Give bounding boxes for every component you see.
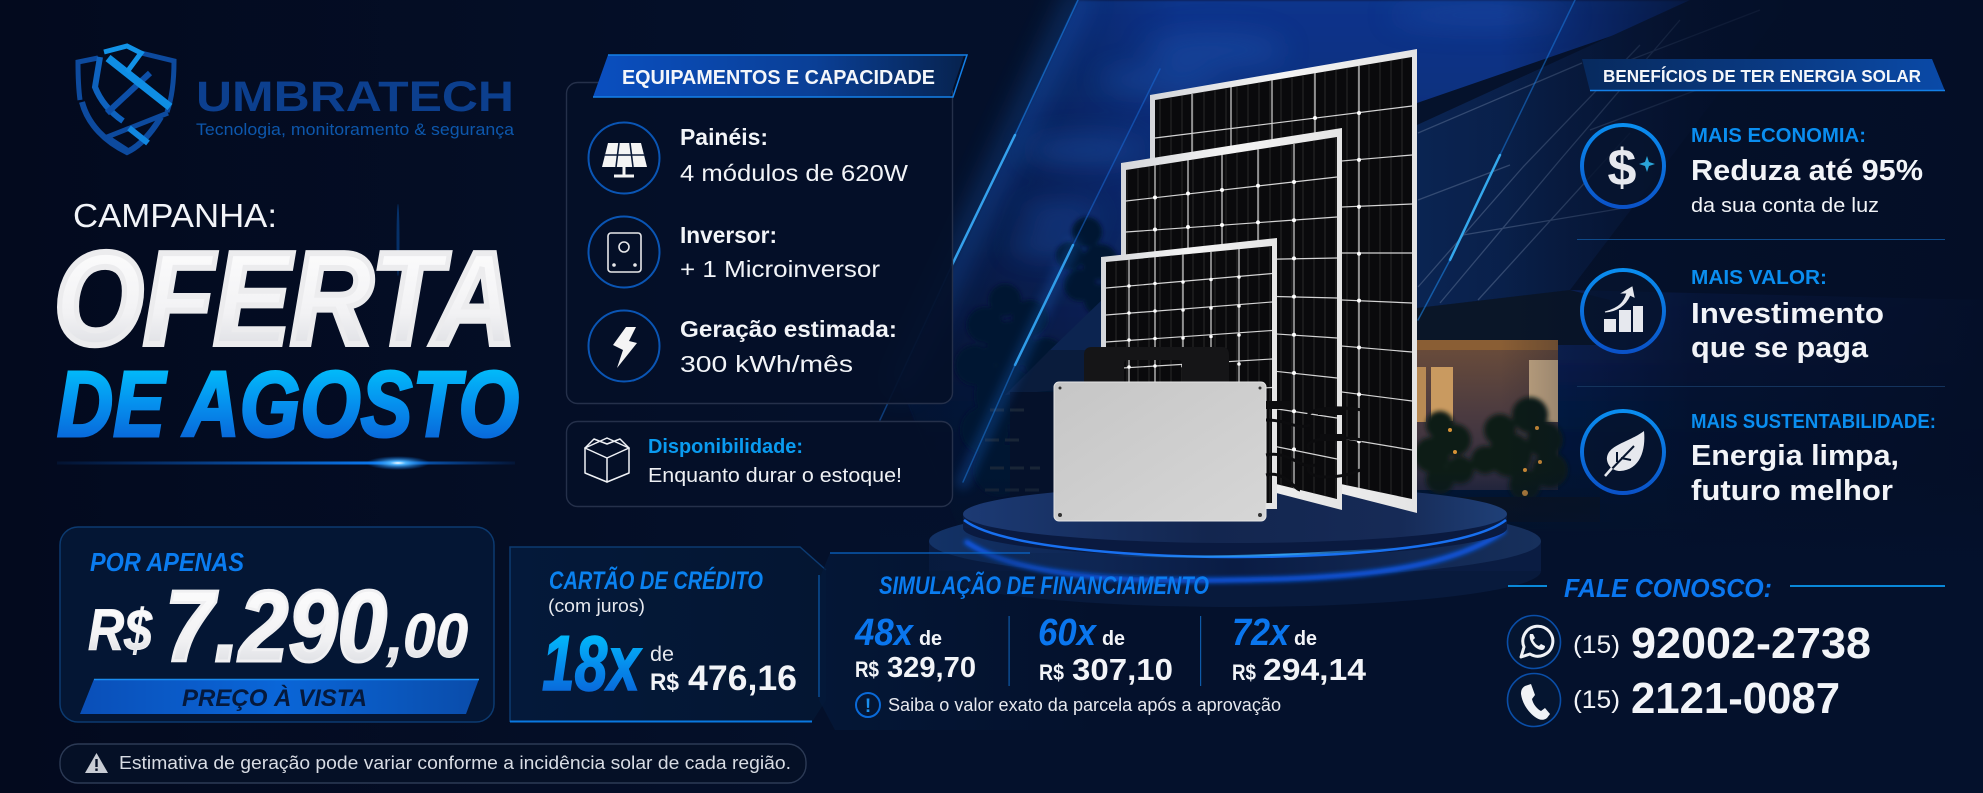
title — [54, 197, 519, 470]
item: inversor — [588, 216, 880, 288]
option: 72x: 294,14 — [1263, 652, 1367, 687]
item: paineis — [588, 122, 908, 194]
phone number: landline: (15) — [1573, 686, 1620, 714]
brand name: UMBRATECH — [196, 73, 514, 121]
icon: telephone — [1508, 674, 1560, 726]
option: 60x: 307,10 — [1072, 652, 1173, 687]
panel: price: POR APENAS — [90, 547, 245, 577]
panel: credit card — [510, 547, 826, 722]
option: 48x: R$ — [855, 657, 879, 682]
header banner: EQUIPAMENTOS E CAPACIDADE — [622, 67, 935, 89]
logo — [78, 46, 515, 152]
item: valor: MAIS VALOR: — [1691, 266, 1827, 289]
price value: R$ — [88, 598, 153, 663]
price button — [80, 679, 479, 714]
item: paineis: 4 módulos de 620W — [680, 160, 908, 186]
disclaimer: Estimativa de geração pode variar conforme a incidência solar de cada região. — [119, 753, 791, 773]
panel: price — [60, 527, 494, 722]
panel: disponibilidade — [566, 422, 952, 506]
option: 48x: 329,70 — [887, 652, 976, 684]
financing note: ! — [865, 696, 871, 717]
option: 72x: 72x — [1232, 612, 1291, 654]
tagline: Tecnologia, monitoramento & segurança — [196, 120, 515, 139]
icon: whatsapp — [1508, 616, 1560, 668]
item: valor — [1582, 266, 1884, 364]
item: economia: da sua conta de luz — [1691, 195, 1879, 217]
header banner — [593, 55, 967, 97]
price value: 7.290 — [165, 571, 387, 683]
phone number: whatsapp: (15) — [1573, 631, 1620, 659]
light streaks — [880, 0, 1575, 482]
product: solar panels — [1054, 49, 1417, 521]
item: economia: Reduza até 95% — [1691, 155, 1923, 187]
item: geracao: Geração estimada: — [680, 316, 897, 342]
panel: financing — [819, 553, 1367, 730]
panel: disponibilidade: Disponibilidade: — [648, 436, 803, 458]
item: economia: $ — [1608, 139, 1637, 197]
option: 72x: de — [1294, 628, 1317, 650]
icon: warning — [85, 753, 108, 773]
item: paineis: Painéis: — [680, 124, 768, 150]
contact — [1508, 573, 1945, 726]
option: 72x: R$ — [1232, 660, 1256, 685]
option: 60x — [1038, 612, 1173, 687]
panel: credit card: 18x — [542, 619, 643, 707]
disclaimer — [60, 744, 806, 783]
item: valor: Investimento — [1691, 298, 1884, 330]
icon: shield — [78, 46, 174, 152]
large panel — [1150, 49, 1417, 513]
microinverter — [1054, 347, 1362, 521]
panel: credit card: de — [650, 643, 674, 666]
option: 60x: de — [1102, 628, 1125, 650]
right house — [1414, 0, 1983, 522]
de agosto heading: DE AGOSTO — [57, 352, 519, 456]
item: sustentabilidade — [1582, 410, 1936, 507]
panel: credit card: CARTÃO DE CRÉDITO — [549, 565, 763, 595]
item: sustentabilidade: Energia limpa, — [1691, 440, 1899, 472]
item: inversor: Inversor: — [680, 222, 777, 248]
option: 72x — [1232, 612, 1367, 687]
item: geracao — [588, 310, 897, 382]
item: sustentabilidade: futuro melhor — [1691, 475, 1893, 507]
header banner — [1582, 59, 1945, 91]
panel: disponibilidade: Enquanto durar o estoque! — [648, 465, 902, 487]
medium panel — [1121, 128, 1342, 510]
price value: ,00 — [386, 602, 468, 671]
panel: credit card: (com juros) — [548, 596, 645, 616]
icon: box — [585, 438, 629, 482]
option: 48x: 48x — [854, 612, 915, 654]
contact: FALE CONOSCO: — [1564, 573, 1772, 603]
item: valor: que se paga — [1691, 332, 1869, 364]
financing note: Saiba o valor exato da parcela após a aprovação — [888, 695, 1281, 715]
item: economia — [1582, 124, 1923, 217]
panel: beneficios — [1577, 59, 1945, 507]
price value — [88, 571, 468, 683]
option: 48x: de — [919, 628, 942, 650]
left house and trees — [955, 217, 1118, 512]
item: inversor: + 1 Microinversor — [680, 256, 880, 282]
option: 60x: R$ — [1039, 660, 1064, 685]
item: geracao: 300 kWh/mês — [680, 351, 853, 377]
item: sustentabilidade: MAIS SUSTENTABILIDADE: — [1691, 410, 1936, 433]
panel: credit card: 476,16 — [688, 659, 797, 698]
item: economia: MAIS ECONOMIA: — [1691, 124, 1866, 147]
panel: equipamentos — [566, 55, 967, 404]
oferta heading: OFERTA — [54, 225, 516, 372]
campanha label: CAMPANHA: — [73, 197, 277, 234]
phone number: landline: 2121-0087 — [1631, 674, 1840, 723]
panel: credit card: R$ — [650, 669, 680, 696]
panel: financing: SIMULAÇÃO DE FINANCIAMENTO — [879, 570, 1209, 600]
option: 60x: 60x — [1038, 612, 1098, 654]
option: 48x — [854, 612, 976, 684]
phone number: whatsapp: 92002-2738 — [1631, 619, 1871, 668]
price button: PREÇO À VISTA — [182, 684, 367, 712]
product: platform — [929, 485, 1541, 607]
header banner: BENEFÍCIOS DE TER ENERGIA SOLAR — [1603, 65, 1921, 86]
small panel — [1101, 238, 1277, 509]
